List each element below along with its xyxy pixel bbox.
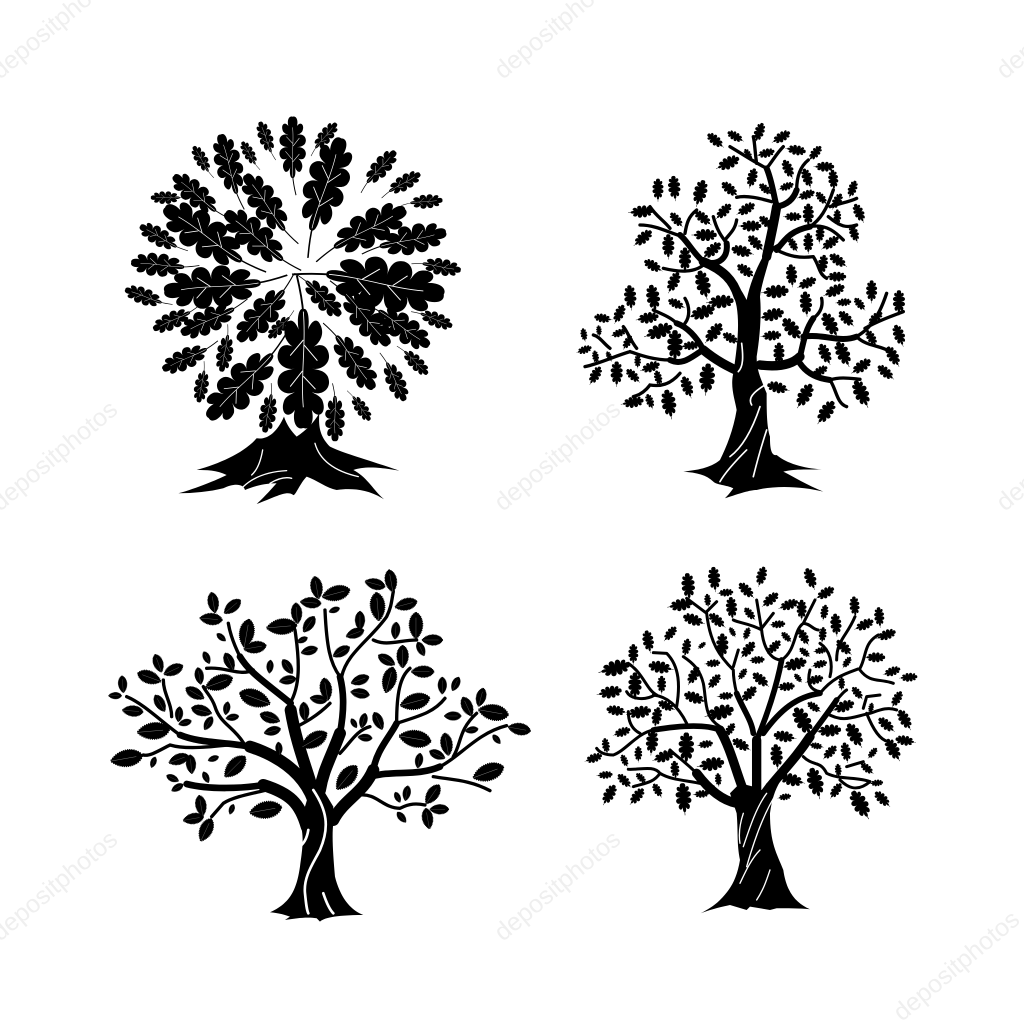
tree 4 bark highlights (739, 793, 777, 900)
tree 2: upper right oak (575, 121, 908, 498)
tree 2 branches (585, 137, 903, 407)
tree 4 branches (597, 598, 897, 803)
tree 1 root highlights (243, 443, 358, 487)
tree 3 trunk twist highlights (300, 790, 333, 913)
tree 4 trunk (701, 782, 810, 913)
tree 1: round oak made of large leaves (122, 117, 462, 504)
watermark: depositphotos (489, 825, 626, 947)
tree 3 trunk (270, 790, 363, 922)
watermark: depositphotos (888, 905, 1024, 1024)
tree 3: lower left broad-leaf oak (108, 569, 532, 922)
tree 4 leaves (583, 566, 918, 823)
watermark: depositphotos (489, 395, 626, 517)
tree 2 bark highlights (720, 343, 770, 482)
tree 2 trunk (683, 243, 823, 498)
tree 2 leaves (575, 121, 908, 428)
tree 4: lower right oak (583, 566, 918, 913)
tree 1 leaves (122, 117, 462, 441)
tree 1 trunk and roots (178, 413, 399, 504)
tree 3 leaves (108, 569, 532, 844)
tree 3 branches (127, 592, 507, 827)
